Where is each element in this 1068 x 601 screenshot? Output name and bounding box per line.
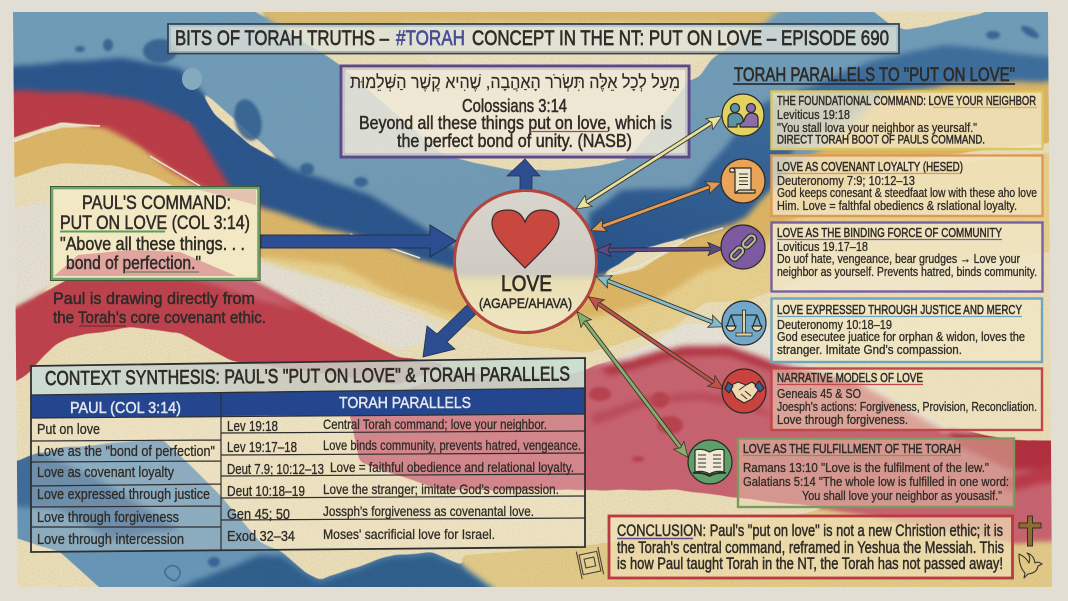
card: fulfillment of Torah <box>738 438 1014 507</box>
card: covenant loyalty: Him. Love = falthfal obediencs & rslational loyalty. <box>777 199 1017 213</box>
label: love: LOVE <box>501 271 552 296</box>
text: Paul drawing from Torah: the Torah's core covenant ethic. <box>53 308 266 327</box>
arrow: love down to context synthesis <box>423 303 478 357</box>
icon: cross <box>1019 516 1041 546</box>
card: narrative models <box>772 368 1042 430</box>
table body: Love through forgiveness <box>37 510 179 526</box>
card: narrative models: Geneais 45 & SO <box>777 386 861 401</box>
card: fulfillment of Torah: Ramans 13:10 "Love is the fulfilment of the lew." <box>743 460 989 475</box>
verse panel: Colossians 3:14: Beyond all these things put on love, which is <box>359 112 672 133</box>
verse panel: Colossians 3:14: Colossians 3:14 <box>462 95 567 116</box>
table column headers: TORAH PARALLELS <box>339 395 471 412</box>
table body: Gen 45; 50 <box>227 507 290 523</box>
label: agape ahava: (AGAPE/AHAVA) <box>479 295 572 311</box>
table body: Love = faithful obedience and relational loyalty. <box>330 459 574 475</box>
card: binding force of community: LOVE AS THE BINDING FORCE OF COMMUNITY <box>777 225 1002 240</box>
panel: Paul's command: PAUL'S COMMAND: <box>82 192 231 214</box>
icon: small scroll <box>576 547 604 579</box>
text: Paul drawing from Torah <box>53 289 266 327</box>
icon: dove <box>1019 553 1042 578</box>
panel: Paul's command: "Above all these things. . . <box>60 233 245 254</box>
table title <box>31 358 585 395</box>
table body: Deut 7.9; 10:12–13 <box>227 462 324 478</box>
icon: scroll <box>721 159 765 203</box>
table body: Lev 19:17–18 <box>227 440 297 456</box>
card: binding force of community <box>772 222 1042 292</box>
card: covenant loyalty: LOVE AS COVENANT LOYALTY (HESED) <box>777 159 963 174</box>
card: binding force of community: Do uof hate, vengeance, bear grudges → Love your <box>777 252 1020 266</box>
card: foundational command <box>772 92 1042 149</box>
panel: Paul's command: PUT ON LOVE (COL 3:14) <box>60 212 250 234</box>
table body: Love through intercession <box>37 532 184 548</box>
table body: Love binds community, prevents hatred, vengeance. <box>323 437 581 453</box>
icon: chain <box>721 225 765 269</box>
icon: open book <box>688 440 732 484</box>
title: CONCEPT IN THE NT: PUT ON LOVE – EPISODE 690 <box>472 27 889 50</box>
icon: scales <box>722 301 766 345</box>
icon: handshake <box>722 369 766 413</box>
card: justice and mercy: stranger. Imitate Gnd's compassion. <box>777 343 962 357</box>
table title: CONTEXT SYNTHESIS: PAUL'S "PUT ON LOVE" & TORAH PARALLELS <box>45 363 570 390</box>
card: narrative models: NARRATIVE MODELS OF LOVE <box>777 370 923 385</box>
card: covenant loyalty <box>772 156 1042 216</box>
central love circle <box>453 189 598 334</box>
panel: context synthesis table <box>31 358 585 552</box>
panel: Paul's command <box>50 186 260 281</box>
card: justice and mercy: God esecutee juatice for orphan & widon, loves the <box>777 330 1025 344</box>
table body: Jossph's forgiveness as covenantal love. <box>323 503 534 519</box>
arrow: love up to verse <box>507 159 540 190</box>
table body: Lev 19:18 <box>227 419 278 435</box>
text: Paul drawing from Torah: Paul is drawing directly from <box>53 289 255 308</box>
card: fulfillment of Torah: LOVE AS THE FULFILLMENT OF THE TORAH <box>743 441 961 456</box>
card: binding force of community: Loviticus 19.17–18 <box>777 239 868 254</box>
table body: Deut 10:18–19 <box>227 484 305 500</box>
verse panel: Colossians 3:14: מֵעַל לְכָל אֵלֶּה תִּשְׂרֹר הָאַהֲבָה, שֶׁהִיא קֶשֶׁר הַשְּׁלֵמוּת <box>350 72 680 92</box>
arrows: love to Torah parallels <box>585 123 713 447</box>
table body: Love the stranger; imitate God's compassion. <box>323 481 559 497</box>
title: BITS OF TORAH TRUTHS – <box>175 27 389 50</box>
table body <box>31 358 585 552</box>
card: foundational command: DIRECT TORAH BOOT OF PAULS COMMAND. <box>777 132 985 146</box>
card: justice and mercy <box>772 298 1042 362</box>
card: fulfillment of Torah: Galatians 5:14 "The whole low is fulfilled in one word: <box>743 474 1009 489</box>
panel: Paul's command: bond of perfection." <box>66 252 201 273</box>
verse panel: Colossians 3:14 <box>341 66 689 157</box>
card: narrative models: Love through forgiveness. <box>777 413 908 427</box>
table body: Central Torah command; love your neighbor. <box>323 416 547 432</box>
card: justice and mercy: Deuteronomy 10:18–19 <box>777 317 892 332</box>
table body: Love as covenant loyalty <box>37 465 175 481</box>
table column headers: PAUL (COL 3:14) <box>70 400 181 417</box>
icon: two people <box>722 94 764 136</box>
card: foundational command: Leviticus 19:18 <box>777 107 850 122</box>
card: covenant loyalty: Deuteronomy 7:9; 10:12–13 <box>777 173 915 188</box>
arrow: Paul's command to love <box>261 225 456 257</box>
panel: conclusion <box>609 516 1012 578</box>
card: foundational command: "You stall lova your neighbor as yeursalf." <box>777 121 977 135</box>
table body: Exod 32–34 <box>227 529 295 545</box>
title <box>168 24 899 54</box>
icon: heart <box>492 210 559 268</box>
table body: Moses' sacrificial love for Israel. <box>323 526 495 542</box>
card: fulfillment of Torah: You shall love your neighbor as yousaslf." <box>802 488 1002 503</box>
title: #TORAH <box>396 27 465 50</box>
table body: Love expressed through justice <box>37 487 210 503</box>
table column headers <box>31 388 585 418</box>
table body: Put on love <box>37 422 100 438</box>
table body: Love as the "bond of perfection" <box>37 444 215 460</box>
verse panel: Colossians 3:14: the perfect bond of unity. (NASB) <box>397 130 632 151</box>
